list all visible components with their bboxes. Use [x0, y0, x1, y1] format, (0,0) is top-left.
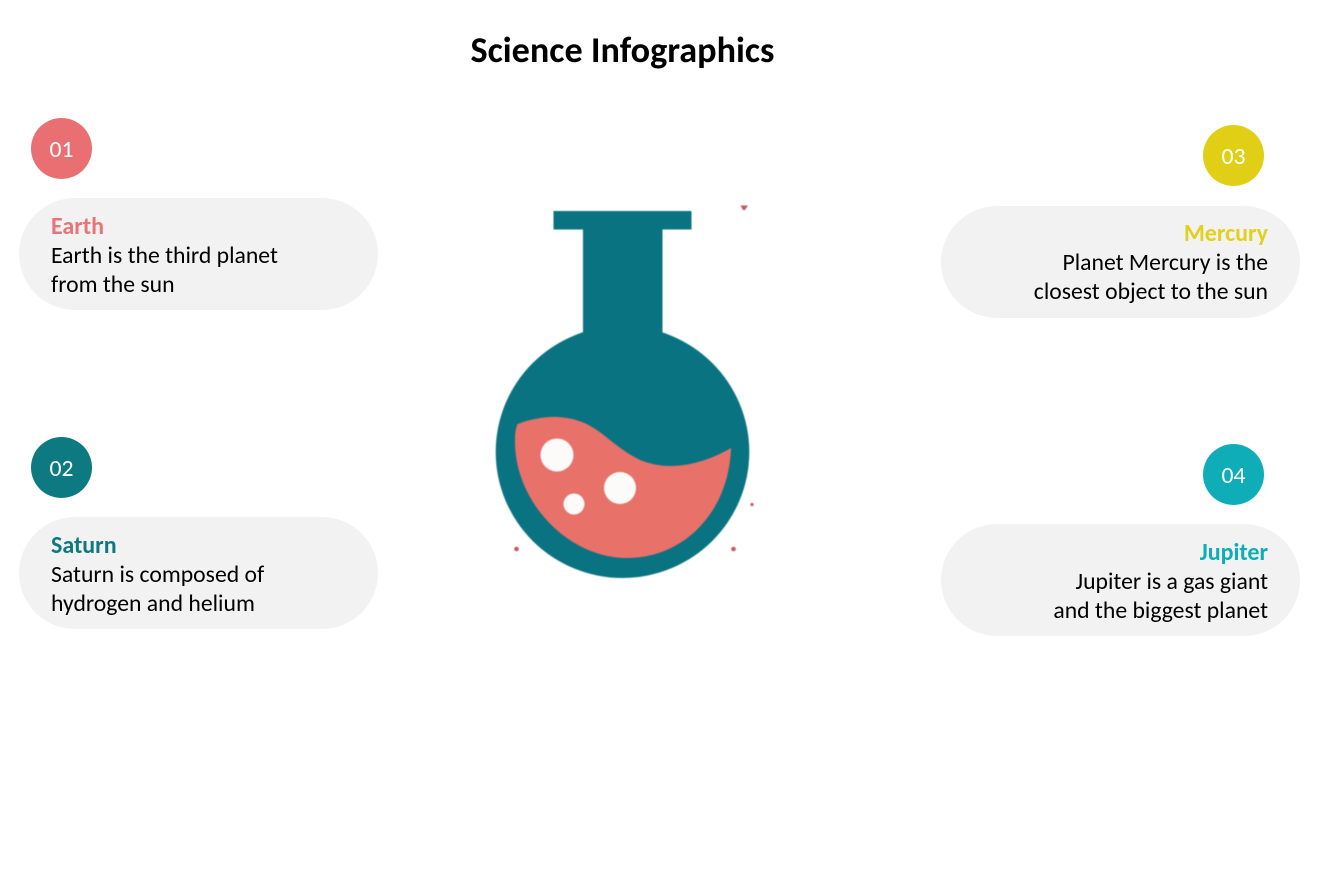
number badge 04: 04: [1221, 461, 1246, 490]
item 02: Saturn: [19, 437, 378, 629]
text: Mercury: Mercury: [1184, 219, 1268, 248]
text: Saturn: [51, 531, 264, 618]
number badge 02: 02: [49, 454, 74, 483]
number badge 03: [1203, 125, 1264, 186]
number badge 02: [31, 437, 92, 498]
item 01: Earth: [19, 118, 378, 310]
text: Saturn: hydrogen and helium: [51, 589, 255, 618]
flask body: [496, 211, 749, 578]
text: Mercury: closest object to the sun: [1034, 277, 1268, 306]
text: Jupiter: Jupiter is a gas giant: [1076, 567, 1268, 596]
text: Jupiter: and the biggest planet: [1053, 596, 1268, 625]
icon: science flask: [494, 204, 754, 579]
pill panel: Mercury: [941, 206, 1300, 318]
pill panel: Earth: [19, 198, 378, 310]
number badge 04: [1203, 444, 1264, 505]
sparkle dots: [514, 206, 754, 551]
text: Saturn: Saturn: [51, 531, 117, 560]
number badge 03: 03: [1221, 142, 1246, 171]
pill panel: Saturn: [19, 517, 378, 629]
text: Earth: Earth: [51, 212, 104, 241]
pill panel: Jupiter: [941, 524, 1300, 636]
liquid: [515, 417, 731, 558]
item 04: Jupiter: [941, 444, 1300, 636]
text: Mercury: Planet Mercury is the: [1062, 248, 1268, 277]
text: Jupiter: Jupiter: [1200, 538, 1268, 567]
text: Jupiter: [1053, 538, 1268, 625]
text: Mercury: [1034, 219, 1268, 306]
item 03: Mercury: [941, 125, 1300, 318]
text: Saturn: Saturn is composed of: [51, 560, 264, 589]
number badge 01: 01: [49, 135, 74, 164]
bubbles: [540, 438, 636, 514]
text: Earth: [51, 212, 278, 299]
text: Earth: Earth is the third planet: [51, 241, 278, 270]
text: Earth: from the sun: [51, 270, 175, 299]
title: Science Infographics: [471, 28, 774, 72]
number badge 01: [31, 118, 92, 179]
